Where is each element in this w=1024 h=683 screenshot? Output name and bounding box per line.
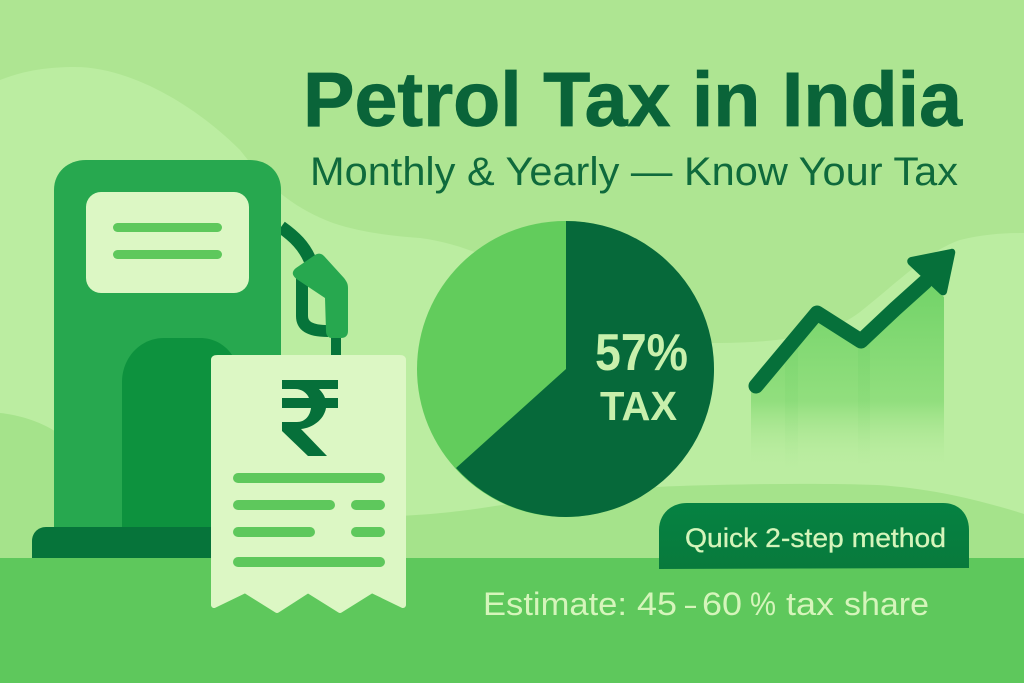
title: Petrol Tax in India bbox=[303, 57, 963, 143]
receipt bbox=[214, 358, 403, 610]
receipt lines bbox=[233, 473, 385, 567]
arrow bbox=[756, 249, 955, 386]
estimate text: – bbox=[685, 586, 696, 622]
estimate text: % bbox=[750, 586, 776, 622]
estimate text: share bbox=[844, 586, 929, 622]
pie label: TAX: TAX bbox=[600, 383, 677, 429]
icon: rupee symbol bbox=[282, 380, 338, 456]
nozzle bbox=[293, 254, 348, 338]
estimate text: 45 bbox=[637, 586, 677, 622]
subtitle: Monthly & Yearly — Know Your Tax bbox=[310, 150, 958, 194]
pump hose bbox=[281, 227, 310, 260]
badge: quick method: Quick 2-step method bbox=[685, 523, 946, 553]
pie chart bbox=[417, 221, 714, 517]
estimate text: tax bbox=[786, 586, 834, 622]
ground band bbox=[0, 558, 1024, 683]
estimate text: 60 bbox=[702, 586, 742, 622]
badge: quick method bbox=[659, 503, 969, 569]
pump screen bbox=[86, 192, 249, 293]
nozzle loop bbox=[302, 278, 328, 331]
estimate text: Estimate: bbox=[483, 586, 627, 622]
pump base bbox=[32, 527, 240, 558]
pump body bbox=[54, 160, 281, 527]
pie label: 57%: 57% bbox=[595, 324, 688, 382]
pump door bbox=[122, 338, 240, 527]
icon: fuel pump bbox=[32, 160, 348, 558]
shaded area bbox=[751, 284, 944, 465]
trend chart bbox=[751, 249, 955, 470]
